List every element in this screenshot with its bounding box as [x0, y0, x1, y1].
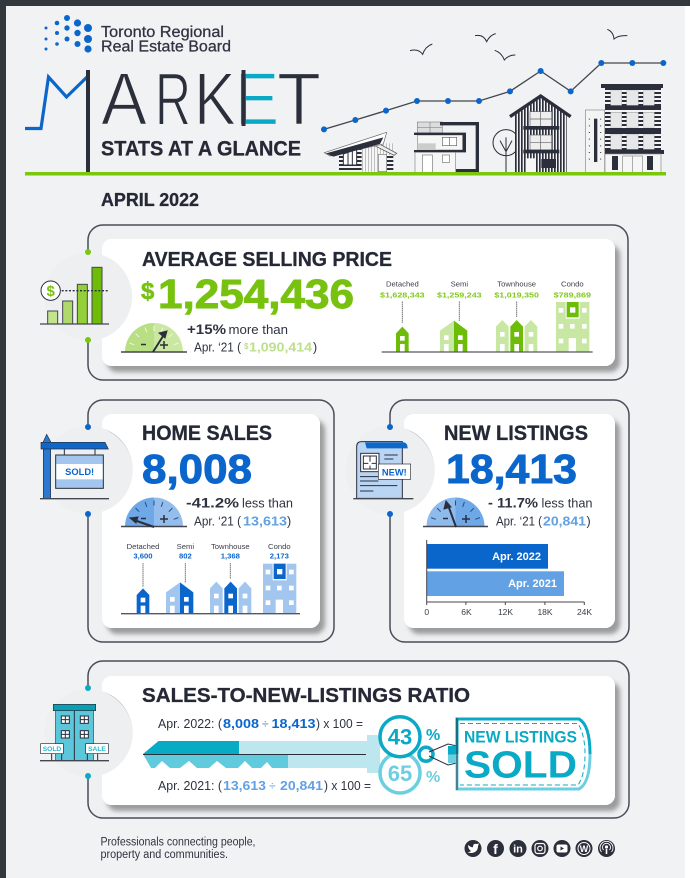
- icon: listing document: [353, 442, 413, 499]
- date heading: APRIL 2022: [101, 190, 199, 210]
- bar chart: new listings: 12K: [498, 607, 513, 617]
- title: MARKET: [25, 58, 321, 175]
- formula 2022: ) x 100 =: [316, 717, 363, 731]
- comparison text: [186, 496, 293, 528]
- social icons: W: [580, 844, 589, 854]
- icon: condo building sold sale: SALE: [88, 746, 106, 753]
- chart: sales by home type: 3,600: [133, 552, 153, 561]
- comparison text: +15%: [187, 322, 226, 337]
- icon: price bar chart: $: [46, 283, 55, 300]
- gauge: [121, 498, 187, 527]
- formula 2021: 13,613: [223, 779, 266, 793]
- comparison text: [187, 322, 317, 354]
- formula 2021: Apr. 2021: (: [158, 779, 223, 793]
- title: MARKET: E: [235, 58, 279, 140]
- formula 2021: ÷: [269, 779, 276, 793]
- comparison text: 13,613: [243, 514, 287, 528]
- chart: sales by home type: 802: [179, 552, 192, 561]
- comparison text: Apr. ‘21 (: [194, 340, 242, 354]
- logo: Toronto Regional Real Estate Board: [44, 15, 231, 56]
- title: MARKET: R: [155, 58, 191, 140]
- formula 2022: 8,008: [223, 717, 259, 731]
- bar chart: new listings: 6K: [461, 607, 472, 617]
- formula 2021: [158, 779, 371, 793]
- comparison text: less than: [542, 496, 593, 510]
- comparison text: ): [313, 340, 317, 354]
- comparison text: less than: [242, 496, 293, 510]
- icon: listing document: NEW!: [382, 467, 407, 477]
- key bar graphic: 43: [388, 724, 412, 750]
- key bar graphic: 65: [388, 761, 412, 786]
- bar chart: new listings: [424, 540, 592, 617]
- comparison text: Apr. ‘21 (: [496, 514, 543, 528]
- social icons: [464, 840, 615, 857]
- skyline illustration: [321, 29, 666, 172]
- formula 2022: Apr. 2022: (: [158, 717, 223, 731]
- chart: price by home type: Condo: [561, 280, 584, 289]
- key bar graphic: %: [426, 769, 440, 786]
- logo: Toronto Regional Real Estate Board: Toronto Regional: [101, 24, 224, 41]
- chart: price by home type: $1,628,343: [380, 291, 425, 300]
- title: MARKET: T: [277, 58, 321, 140]
- formula 2022: 18,413: [272, 717, 316, 731]
- house 2: [414, 122, 479, 172]
- price line: [321, 60, 666, 132]
- comparison text: ): [586, 514, 591, 528]
- chart: sales by home type: Semi: [177, 542, 194, 551]
- panel: new listings: [346, 400, 629, 642]
- icon: condo building sold sale: SOLD: [43, 746, 61, 753]
- comparison text: 1,090,414: [249, 340, 312, 354]
- value: home sales: 8,008: [142, 446, 252, 492]
- chart: price by home type: $1,259,243: [437, 291, 482, 300]
- value: average price: $: [141, 278, 155, 305]
- bar chart: new listings: Apr. 2021: [508, 578, 557, 590]
- panel: sales-to-new-listings ratio: [40, 661, 629, 818]
- title: MARKET: K: [194, 58, 236, 140]
- chart: sales by home type: [121, 542, 300, 614]
- chart: price by home type: $1,019,350: [494, 291, 539, 300]
- comparison text: Apr. ‘21 (: [194, 514, 242, 528]
- icon: sold sign: [40, 434, 109, 499]
- key bar graphic: %: [426, 727, 440, 744]
- social icons: in: [513, 844, 523, 856]
- comparison text: ): [287, 514, 291, 528]
- value: new listings: 18,413: [446, 446, 577, 492]
- heading: SALES-TO-NEW-LISTINGS RATIO: [142, 685, 470, 707]
- formula 2021: 20,841: [280, 779, 323, 793]
- chart: price by home type: Semi: [451, 280, 468, 289]
- bar chart: new listings: 0: [424, 607, 429, 617]
- gauge: [121, 323, 187, 352]
- social icons: f: [493, 841, 498, 857]
- comparison text: - 11.7%: [488, 496, 538, 510]
- subtitle: STATS AT A GLANCE: [101, 138, 301, 160]
- bar chart: new listings: Apr. 2022: [492, 551, 541, 563]
- key bar graphic: [143, 717, 440, 793]
- heading: NEW LISTINGS: [444, 422, 588, 445]
- panel: home sales: [40, 400, 334, 642]
- panel: average selling price: [40, 225, 628, 380]
- icon: sold sign: SOLD!: [65, 467, 94, 477]
- chart: sales by home type: Detached: [127, 542, 159, 551]
- tag: new listings sold: [429, 718, 590, 790]
- bar chart: new listings: 24K: [577, 607, 592, 617]
- comparison text: -41.2%: [186, 496, 239, 510]
- chart: price by home type: [380, 280, 593, 352]
- tag: new listings sold: SOLD: [464, 744, 577, 786]
- footer tagline: Professionals connecting people,: [100, 836, 256, 848]
- heading: AVERAGE SELLING PRICE: [142, 248, 392, 271]
- title: MARKET: A: [101, 58, 148, 140]
- value: average price: 1,254,436: [158, 271, 354, 317]
- icon: condo building sold sale: [40, 704, 109, 761]
- gauge: [423, 498, 488, 527]
- footer tagline: [100, 836, 256, 861]
- comparison text: [488, 496, 593, 528]
- comparison text: more than: [228, 323, 288, 337]
- comparison text: 20,841: [543, 514, 586, 528]
- house 3 with tree: [493, 96, 571, 172]
- comparison text: $: [244, 342, 249, 351]
- logo: Toronto Regional Real Estate Board: Real Estate Board: [101, 38, 231, 56]
- chart: price by home type: Townhouse: [497, 280, 536, 289]
- chart: sales by home type: 2,173: [270, 552, 289, 561]
- chart: price by home type: Detached: [386, 280, 419, 289]
- house 1: [324, 132, 397, 172]
- birds: [410, 29, 627, 60]
- footer tagline: property and communities.: [100, 849, 228, 861]
- heading: HOME SALES: [142, 422, 272, 445]
- chart: sales by home type: 1,368: [221, 552, 241, 561]
- formula 2021: ) x 100 =: [324, 779, 371, 793]
- chart: price by home type: $789,869: [554, 291, 591, 300]
- apartment building: [585, 84, 664, 172]
- bar chart: new listings: 18K: [537, 607, 553, 617]
- icon: price bar chart: [40, 267, 109, 324]
- tag: new listings sold: NEW LISTINGS: [464, 728, 577, 746]
- formula 2022: [158, 717, 363, 731]
- chart: sales by home type: Townhouse: [211, 542, 250, 551]
- chart: sales by home type: Condo: [268, 542, 291, 551]
- formula 2022: ÷: [262, 717, 269, 731]
